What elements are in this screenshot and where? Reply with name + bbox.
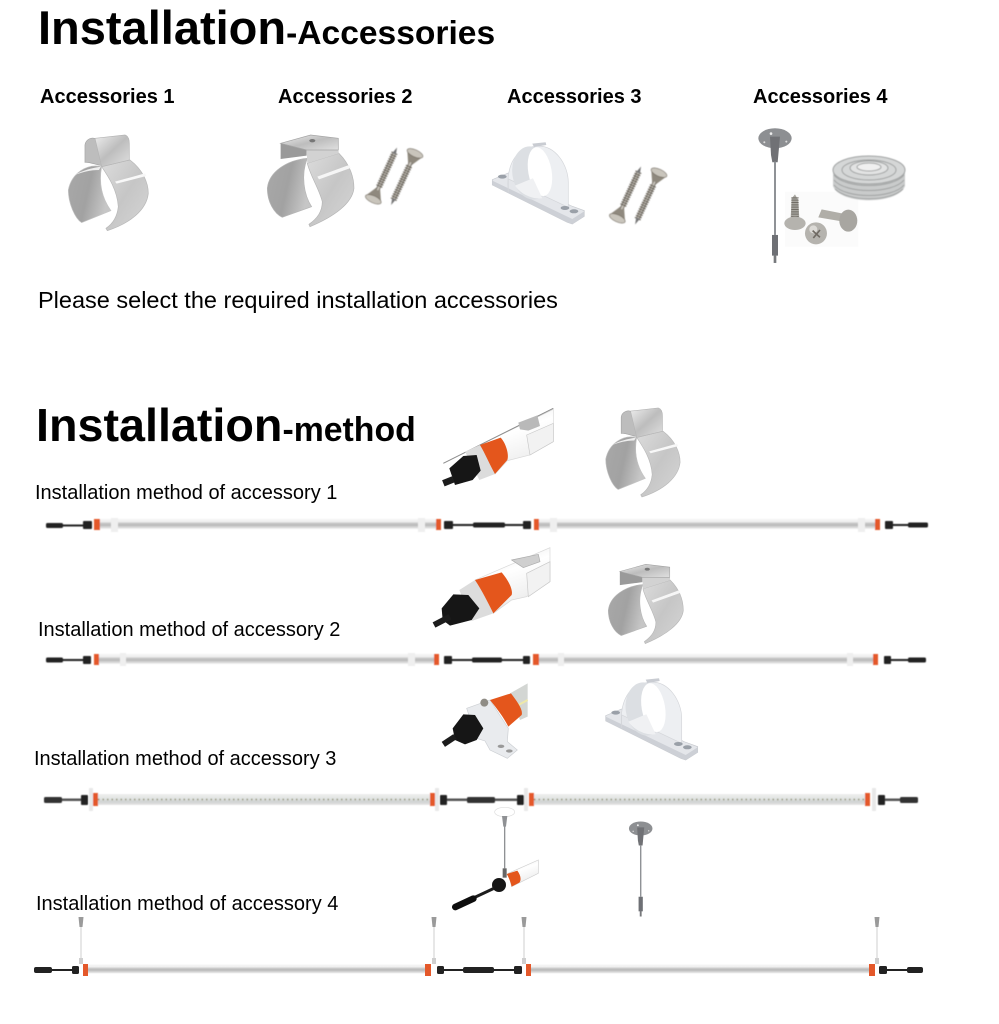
icon: accessory 2 screws — [364, 144, 424, 209]
closeup: method 4 suspended tube end — [455, 807, 538, 907]
icon: accessory 3 screws — [608, 163, 668, 228]
row: method 1 tubes — [46, 518, 928, 532]
closeup: method 2 tube end with clip — [434, 548, 550, 626]
label: method 4: Installation method of accessory 4 — [36, 893, 338, 915]
icon: accessory 1 clip — [68, 135, 148, 231]
title: Installation-method: Installation-method — [36, 399, 416, 451]
icon: accessory 4 wire spool — [833, 156, 905, 200]
heading: Accessories 1: Accessories 1 — [40, 86, 175, 108]
row: method 4 suspended tubes — [34, 917, 923, 976]
row: method 2 tubes — [46, 653, 926, 666]
icon: method 4 hanger — [629, 821, 652, 917]
text: select accessories note: Please select the required installation accessories — [38, 287, 558, 313]
closeup: method 1 tube end with clip — [443, 408, 553, 485]
row: method 3 LED tubes — [44, 788, 918, 811]
label: method 3: Installation method of accessory 3 — [34, 748, 336, 770]
closeup: method 3 tube end with bracket — [443, 683, 528, 758]
heading: Accessories 3: Accessories 3 — [507, 86, 642, 108]
heading: Accessories 2: Accessories 2 — [278, 86, 413, 108]
heading: Accessories 4: Accessories 4 — [753, 86, 888, 108]
icon: accessory 2 clip — [267, 135, 354, 227]
icon: accessory 3 bracket — [492, 142, 584, 224]
title: Installation-Accessories: Installation-Accessories — [38, 1, 495, 54]
icon: accessory 4 hanger — [758, 128, 792, 263]
icon: accessory 4 screws — [784, 192, 858, 247]
icon: method 3 bracket — [606, 678, 698, 760]
label: method 1: Installation method of accessory 1 — [35, 482, 337, 504]
label: method 2: Installation method of accessory 2 — [38, 619, 340, 641]
icon: method 2 clip — [608, 564, 683, 644]
icon: method 1 clip — [606, 408, 680, 497]
